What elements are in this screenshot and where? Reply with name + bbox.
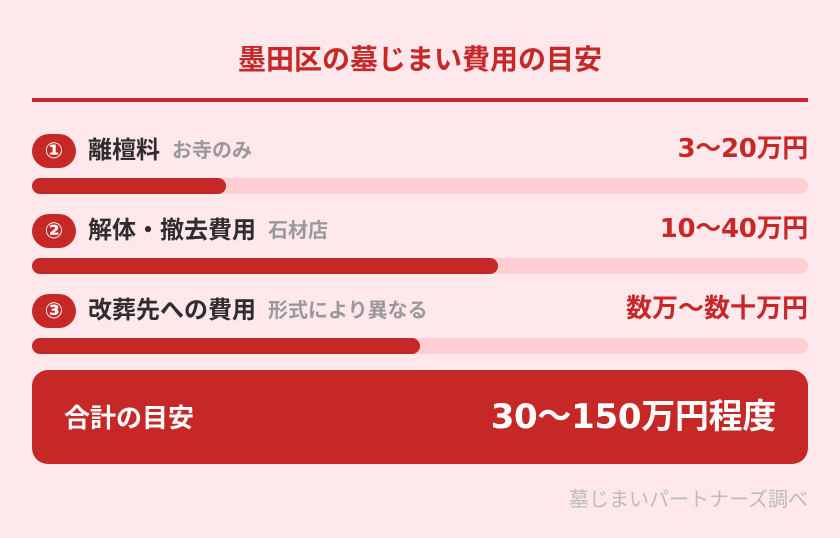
- label 3: 改葬先への費用: [88, 296, 256, 324]
- value 2: 10〜40万円: [660, 214, 808, 244]
- badge 3: [32, 294, 76, 328]
- bar 2: [32, 258, 808, 274]
- total label: 合計の目安: [64, 404, 194, 434]
- note 1: お寺のみ: [172, 138, 252, 162]
- badge 3: ③: [45, 299, 63, 324]
- badge 1: ①: [45, 139, 63, 164]
- title: 墨田区の墓じまい費用の目安: [238, 43, 602, 76]
- total value: 30〜150万円程度: [491, 397, 776, 437]
- value 3: 数万〜数十万円: [626, 294, 808, 324]
- title rule: [32, 98, 808, 102]
- row 1: 離檀料: [32, 134, 808, 194]
- value 1: 3〜20万円: [678, 134, 808, 164]
- bar 1: [32, 178, 808, 194]
- bar 3: [32, 338, 808, 354]
- row 2: 解体・撤去費用: [32, 214, 808, 274]
- label 1: 離檀料: [88, 136, 160, 164]
- note 3: 形式により異なる: [268, 298, 428, 322]
- row 3: 改葬先への費用: [32, 294, 808, 354]
- total panel: [32, 370, 808, 464]
- label 2: 解体・撤去費用: [88, 216, 256, 244]
- note 2: 石材店: [268, 218, 328, 242]
- badge 2: ②: [45, 219, 63, 244]
- badge 2: [32, 214, 76, 248]
- badge 1: [32, 134, 76, 168]
- source note: 墓じまいパートナーズ調べ: [569, 487, 808, 511]
